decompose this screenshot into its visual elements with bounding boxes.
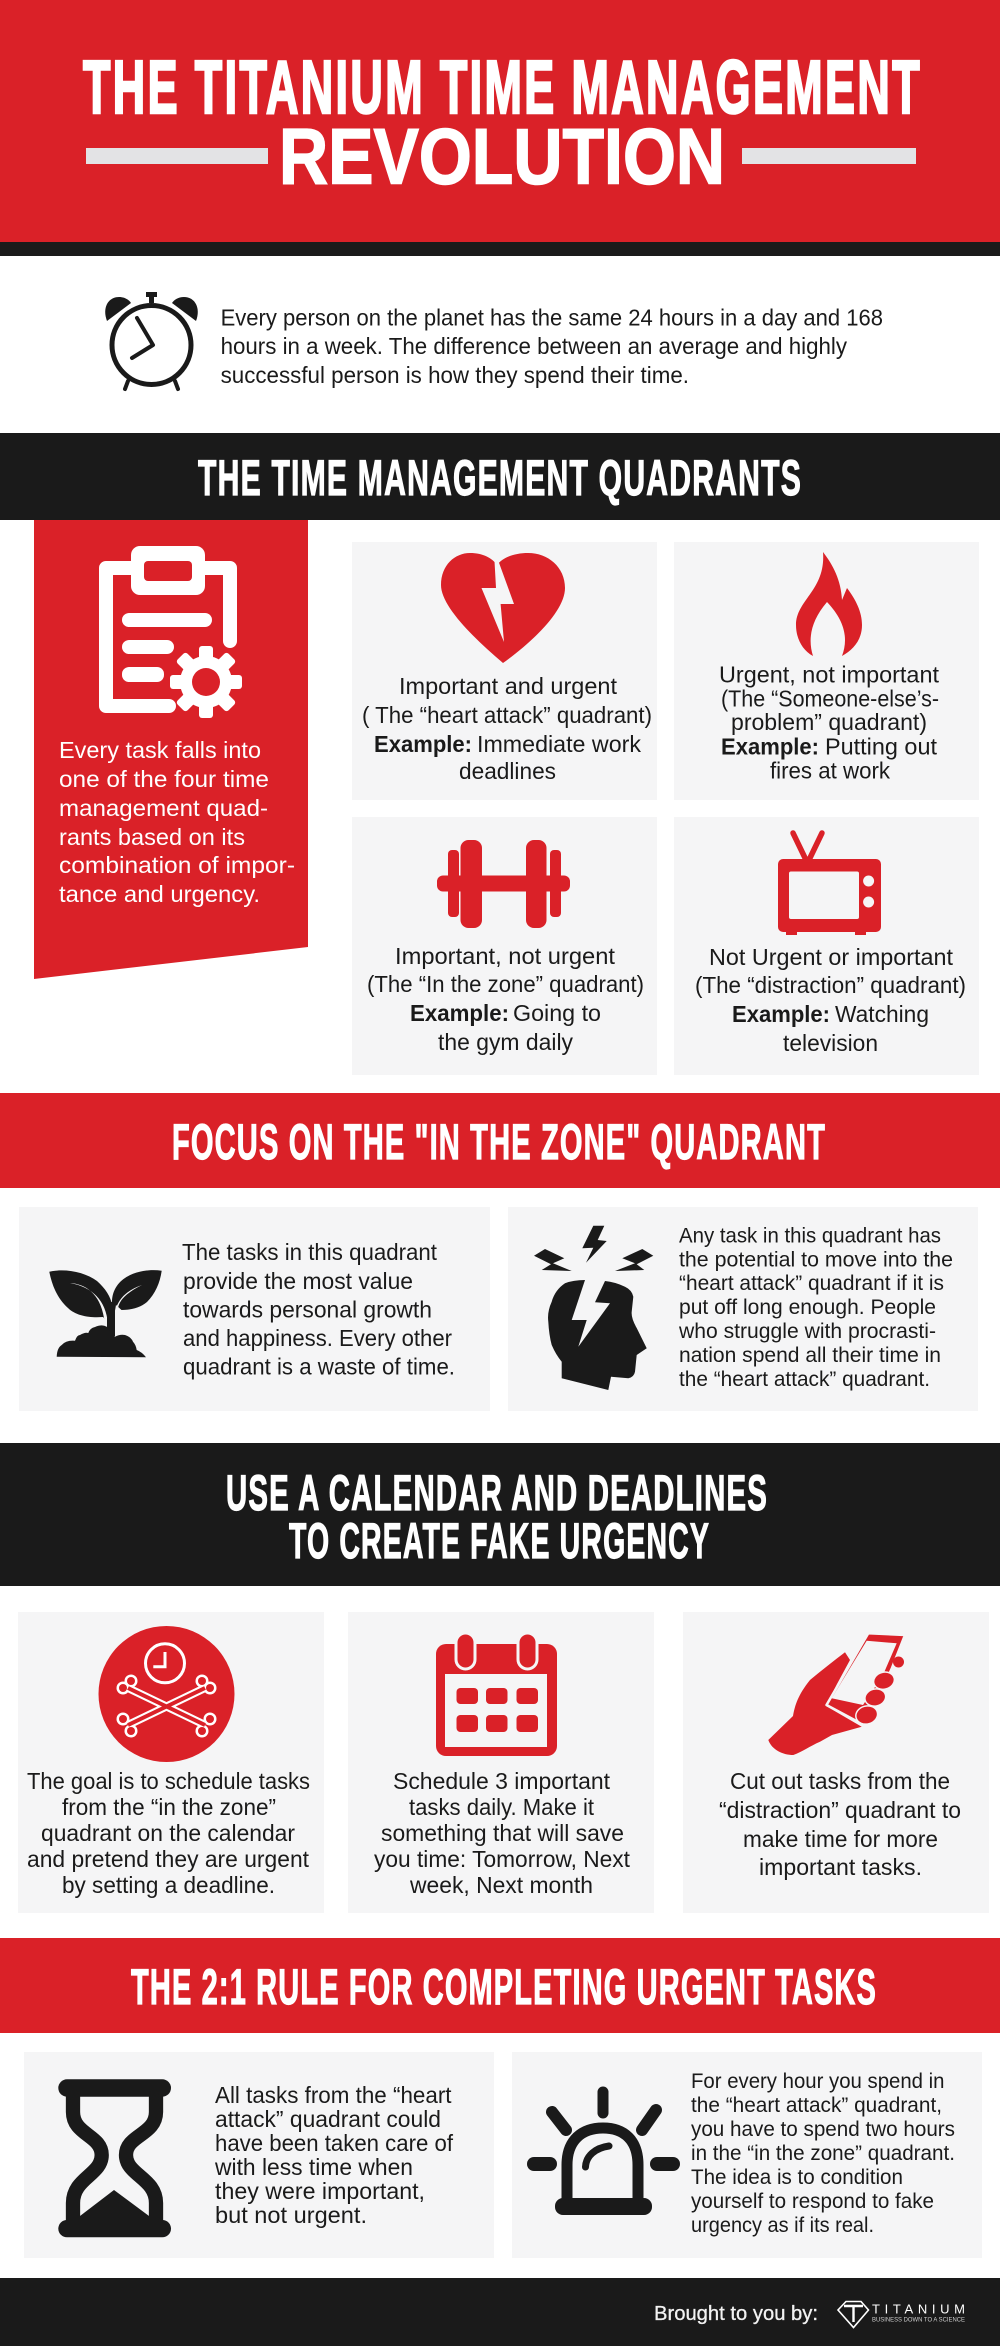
panel: someone else's problem quadrant: fires at work bbox=[770, 758, 890, 784]
icon: alarm clock bbox=[105, 292, 198, 389]
intro text: successful person is how they spend their time. bbox=[221, 362, 689, 388]
panel: someone else's problem quadrant bbox=[674, 542, 979, 800]
icon: clock and crossbones bbox=[98, 1626, 234, 1762]
panel: value of in the zone tasks bbox=[19, 1207, 490, 1411]
panel: procrastination risk: nation spend all their time in bbox=[679, 1343, 941, 1367]
panel: 2:1 rule explanation bbox=[512, 2052, 982, 2258]
header banner bbox=[0, 0, 1000, 256]
icon: titanium logo: BUSINESS DOWN TO A SCIENCE bbox=[872, 2316, 966, 2324]
icon: calendar bbox=[436, 1633, 557, 1756]
icon: sprout bbox=[49, 1270, 162, 1357]
panel: distraction quadrant bbox=[674, 817, 979, 1075]
icon: broken heart bbox=[441, 552, 565, 663]
panel: cut out distraction tasks bbox=[683, 1612, 989, 1913]
intro text: hours in a week. The difference between an average and highly bbox=[221, 333, 847, 359]
panel: 2:1 rule explanation: in the “in the zone” quadrant. bbox=[691, 2141, 955, 2165]
explainer text: Every task falls into bbox=[59, 737, 261, 763]
panel: schedule tasks on the calendar: and pretend they are urgent bbox=[27, 1846, 310, 1872]
panel: procrastination risk: the “heart attack” quadrant. bbox=[679, 1367, 930, 1391]
panel: heart attack tasks bbox=[24, 2052, 494, 2258]
panel: heart attack tasks: they were important, bbox=[215, 2178, 425, 2204]
panel: procrastination risk: put off long enough. People bbox=[679, 1295, 936, 1319]
panel: someone else's problem quadrant: Putting out bbox=[825, 734, 938, 760]
panel: value of in the zone tasks: towards personal growth bbox=[183, 1296, 432, 1322]
explainer text: combination of impor- bbox=[59, 852, 295, 878]
heading bbox=[226, 1465, 768, 1569]
panel: distraction quadrant: Example: bbox=[732, 1001, 830, 1027]
panel: four quadrants explainer bbox=[34, 520, 308, 979]
panel: value of in the zone tasks: and happiness. Every other bbox=[183, 1325, 452, 1351]
panel: cut out distraction tasks: Cut out tasks from the bbox=[730, 1768, 950, 1794]
panel: heart attack tasks: with less time when bbox=[214, 2154, 413, 2180]
panel: procrastination risk: who struggle with procrasti- bbox=[678, 1319, 936, 1343]
section band: the time management quadrants bbox=[0, 433, 1000, 520]
panel: schedule 3 important tasks: something that will save bbox=[381, 1820, 624, 1846]
icon: flame bbox=[796, 552, 862, 656]
panel: distraction quadrant: Watching bbox=[835, 1001, 929, 1027]
panel: value of in the zone tasks: provide the most value bbox=[183, 1268, 413, 1294]
panel: schedule 3 important tasks: you time: Tomorrow, Next bbox=[374, 1846, 631, 1872]
explainer text: rants based on its bbox=[59, 824, 245, 850]
section band: use a calendar and deadlines bbox=[0, 1443, 1000, 1586]
panel: heart attack quadrant: deadlines bbox=[459, 758, 556, 784]
panel: 2:1 rule explanation: the “heart attack” quadrant, bbox=[691, 2093, 942, 2117]
icon: head with lightning bbox=[534, 1226, 653, 1390]
panel: heart attack quadrant bbox=[352, 542, 657, 800]
panel: in the zone quadrant: (The “In the zone” quadrant) bbox=[367, 971, 644, 997]
panel: heart attack quadrant: Important and urgent bbox=[399, 673, 618, 699]
panel: heart attack tasks: but not urgent. bbox=[215, 2202, 367, 2228]
panel: procrastination risk bbox=[508, 1207, 978, 1411]
panel: procrastination risk: “heart attack” quadrant if it is bbox=[679, 1271, 944, 1295]
panel: schedule 3 important tasks: week, Next month bbox=[409, 1872, 593, 1898]
panel: heart attack tasks: have been taken care of bbox=[215, 2130, 454, 2156]
panel: distraction quadrant: (The “distraction” quadrant) bbox=[695, 972, 966, 998]
icon: hand holding phone bbox=[768, 1633, 905, 1755]
panel: schedule 3 important tasks: tasks daily. Make it bbox=[409, 1794, 595, 1820]
panel: in the zone quadrant: the gym daily bbox=[438, 1029, 573, 1055]
panel: cut out distraction tasks: “distraction” quadrant to bbox=[719, 1797, 961, 1823]
panel: value of in the zone tasks: quadrant is a waste of time. bbox=[183, 1354, 455, 1380]
panel: schedule 3 important tasks bbox=[348, 1612, 654, 1913]
intro text: Every person on the planet has the same 24 hours in a day and 168 bbox=[221, 304, 883, 330]
panel: in the zone quadrant: Important, not urgent bbox=[395, 943, 616, 969]
icon: dumbbell bbox=[437, 840, 570, 928]
panel: someone else's problem quadrant: problem” quadrant) bbox=[731, 709, 927, 735]
intro text bbox=[221, 304, 883, 388]
explainer text bbox=[59, 737, 295, 907]
explainer text: one of the four time bbox=[59, 766, 269, 792]
panel: someone else's problem quadrant: (The “Someone-else’s- bbox=[721, 686, 939, 712]
explainer text: tance and urgency. bbox=[59, 881, 260, 907]
panel: in the zone quadrant: Going to bbox=[513, 1000, 601, 1026]
panel: in the zone quadrant: Example: bbox=[410, 1000, 509, 1026]
explainer text: management quad- bbox=[59, 795, 268, 821]
panel: 2:1 rule explanation: yourself to respond to fake bbox=[691, 2189, 934, 2213]
panel: heart attack tasks: attack” quadrant could bbox=[215, 2106, 441, 2132]
panel: 2:1 rule explanation: For every hour you spend in bbox=[691, 2069, 944, 2093]
panel: schedule 3 important tasks: Schedule 3 important bbox=[393, 1768, 611, 1794]
panel: procrastination risk: Any task in this quadrant has bbox=[679, 1224, 941, 1248]
panel: heart attack tasks: All tasks from the “heart bbox=[215, 2082, 452, 2108]
section band: the 2:1 rule bbox=[0, 1938, 1000, 2033]
panel: procrastination risk: the potential to move into the bbox=[679, 1248, 953, 1272]
panel: someone else's problem quadrant: Example: bbox=[721, 734, 819, 760]
panel: heart attack quadrant: ( The “heart attack” quadrant) bbox=[362, 702, 652, 728]
icon: hourglass bbox=[58, 2079, 171, 2237]
credit text: Brought to you by: bbox=[654, 2303, 818, 2325]
panel: heart attack quadrant: Immediate work bbox=[477, 731, 642, 757]
icon: titanium logo bbox=[838, 2302, 966, 2328]
panel: distraction quadrant: Not Urgent or important bbox=[709, 944, 954, 970]
panel: cut out distraction tasks: important tasks. bbox=[759, 1854, 922, 1880]
icon: siren bbox=[534, 2092, 673, 2215]
panel: cut out distraction tasks: make time for more bbox=[743, 1826, 938, 1852]
panel: schedule tasks on the calendar: from the “in the zone” bbox=[62, 1794, 276, 1820]
panel: heart attack quadrant: Example: bbox=[374, 731, 472, 757]
panel: schedule tasks on the calendar: The goal is to schedule tasks bbox=[27, 1768, 310, 1794]
subtitle: REVOLUTION bbox=[279, 112, 725, 200]
panel: 2:1 rule explanation: The idea is to condition bbox=[691, 2165, 903, 2189]
icon: titanium logo: TITANIUM bbox=[872, 2302, 965, 2316]
icon: television bbox=[778, 833, 881, 935]
panel: 2:1 rule explanation: you have to spend two hours bbox=[691, 2117, 955, 2141]
panel: value of in the zone tasks: The tasks in this quadrant bbox=[182, 1239, 438, 1265]
section band: focus on the in the zone quadrant bbox=[0, 1093, 1000, 1188]
panel: in the zone quadrant bbox=[352, 817, 657, 1075]
footer bbox=[0, 2278, 1000, 2346]
panel: someone else's problem quadrant: Urgent, not important bbox=[719, 662, 940, 688]
icon: clipboard with gear bbox=[106, 546, 242, 718]
panel: distraction quadrant: television bbox=[783, 1030, 878, 1056]
panel: 2:1 rule explanation: urgency as if its real. bbox=[691, 2213, 874, 2237]
panel: schedule tasks on the calendar bbox=[18, 1612, 324, 1913]
panel: schedule tasks on the calendar: by setting a deadline. bbox=[62, 1872, 275, 1898]
panel: schedule tasks on the calendar: quadrant on the calendar bbox=[41, 1820, 295, 1846]
